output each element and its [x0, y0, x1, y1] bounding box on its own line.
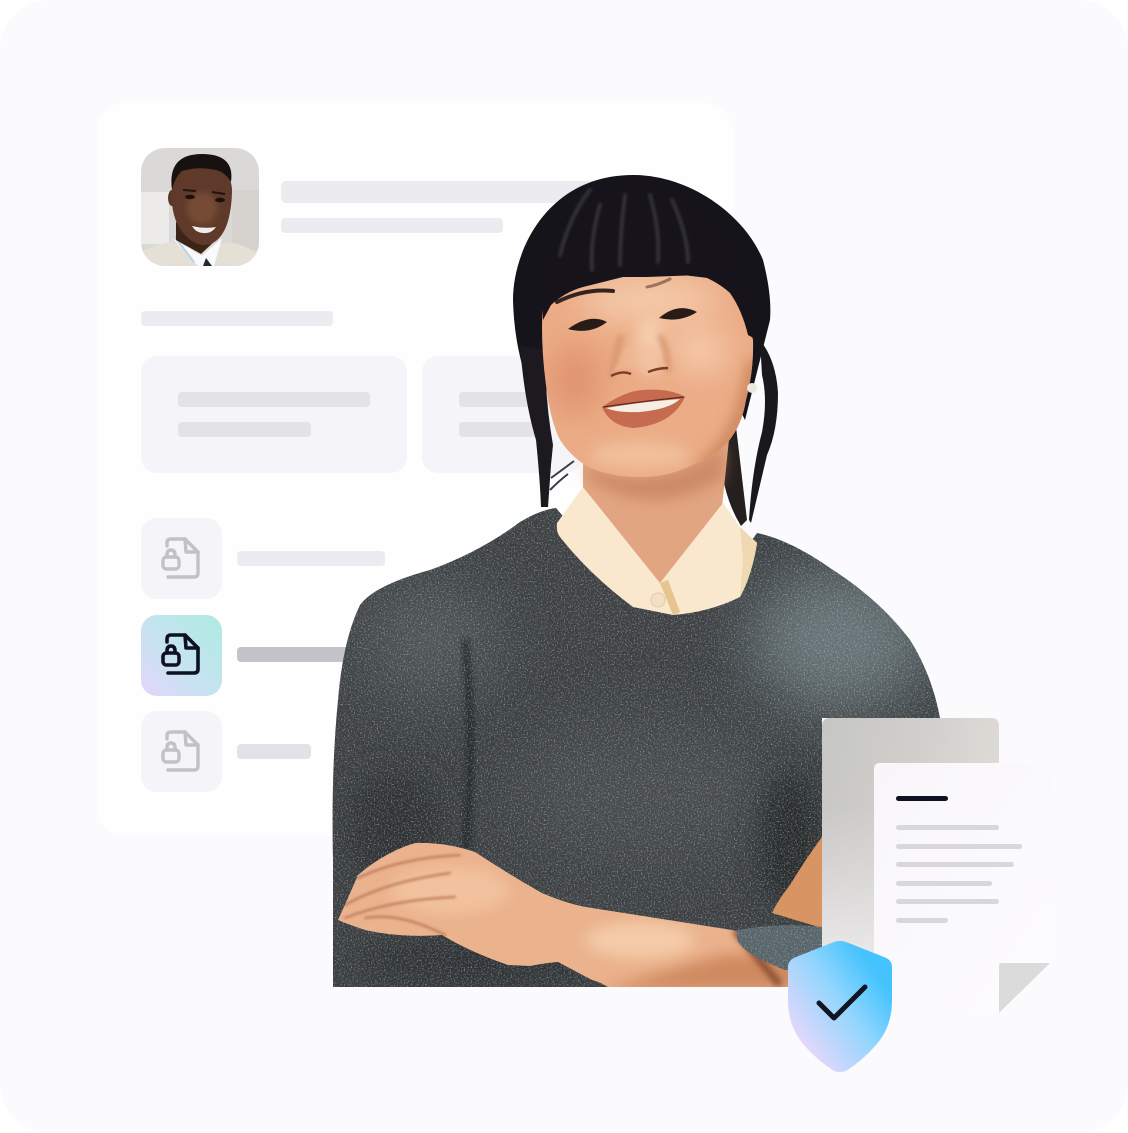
back document [822, 718, 999, 966]
face [542, 276, 754, 477]
document stack [822, 718, 1053, 1014]
left strands [521, 361, 553, 507]
left wisps [550, 461, 574, 490]
icon: locked file [163, 732, 198, 770]
right strands [724, 430, 747, 526]
hair highlights [560, 190, 688, 270]
info tile 2 [422, 356, 582, 473]
sweater [320, 500, 960, 1000]
forearm and hand [338, 842, 788, 987]
file row 1 [141, 518, 385, 599]
earring [747, 383, 757, 393]
document text lines [896, 825, 1022, 923]
hair back mass [513, 175, 770, 420]
collar button [651, 593, 665, 607]
sweater light shading [750, 570, 930, 710]
nose [610, 343, 670, 376]
file row 2 active [141, 615, 362, 696]
right hand [772, 837, 822, 928]
icon: locked file [163, 539, 198, 577]
neck shadow [583, 445, 725, 500]
eyes [568, 308, 697, 331]
front document [874, 763, 1053, 1014]
cuff [737, 925, 822, 970]
finger creases [345, 855, 460, 935]
bangs [542, 270, 752, 338]
name placeholder lines [281, 181, 601, 233]
teeth [606, 399, 680, 412]
icon: check mark [819, 987, 865, 1018]
lips [602, 390, 685, 428]
section heading placeholder [141, 311, 333, 326]
document title line [896, 796, 948, 801]
shield badge [788, 941, 892, 1072]
profile card [141, 148, 593, 772]
eyebrows [557, 279, 670, 302]
info tile 1 [141, 356, 407, 473]
neck [583, 430, 730, 585]
file row 3 [141, 711, 311, 792]
icon: locked file active [163, 635, 198, 673]
shirt collar [557, 487, 757, 615]
fold corner [999, 963, 1050, 1013]
woman portrait [320, 175, 960, 1000]
avatar photo [141, 148, 259, 266]
